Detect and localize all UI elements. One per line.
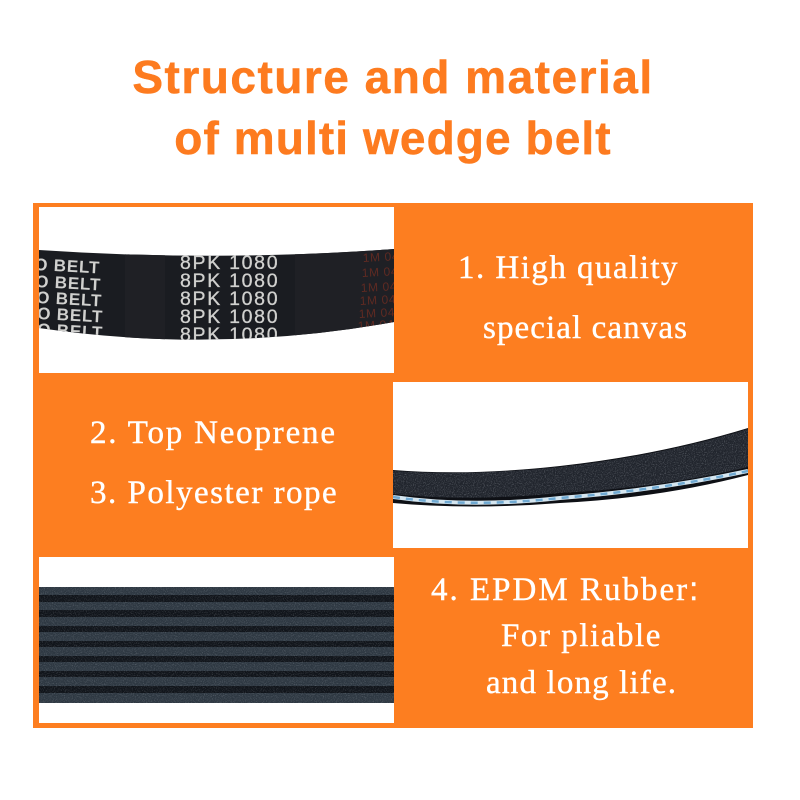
text: EPDM rubber benefits: and long life.: [486, 665, 677, 701]
text: high quality special canvas: 1. High quality: [458, 250, 679, 286]
title: of multi wedge belt: [174, 112, 612, 164]
text: high quality special canvas: special canvas: [483, 310, 688, 346]
text: EPDM rubber benefits: For pliable: [501, 618, 662, 654]
text: high quality special canvas: [458, 250, 688, 346]
text: top neoprene and polyester rope: 3. Polyester rope: [90, 475, 338, 511]
photo: belt side profile: [393, 382, 748, 548]
photo: belt with printed markings: 8PK 1080: [180, 324, 279, 346]
photo: belt with printed markings: 8PK 1080: [180, 270, 279, 292]
photo: ribbed underside of belt: [39, 557, 394, 723]
text: top neoprene and polyester rope: [90, 415, 338, 511]
text: EPDM rubber benefits: 4. EPDM Rubber:: [431, 570, 700, 608]
orange panel: [33, 203, 753, 728]
title: Structure and material: [132, 51, 654, 103]
text: EPDM rubber benefits: [431, 570, 700, 701]
photo: belt with printed markings: 8PK 1080: [180, 288, 279, 310]
photo: belt with printed markings: 8PK 1080: [180, 252, 279, 274]
photo: belt with printed markings: 8PK 1080: [180, 306, 279, 328]
title: [132, 51, 654, 164]
photo: belt with printed markings: [39, 207, 394, 373]
text: top neoprene and polyester rope: 2. Top Neoprene: [90, 415, 337, 451]
